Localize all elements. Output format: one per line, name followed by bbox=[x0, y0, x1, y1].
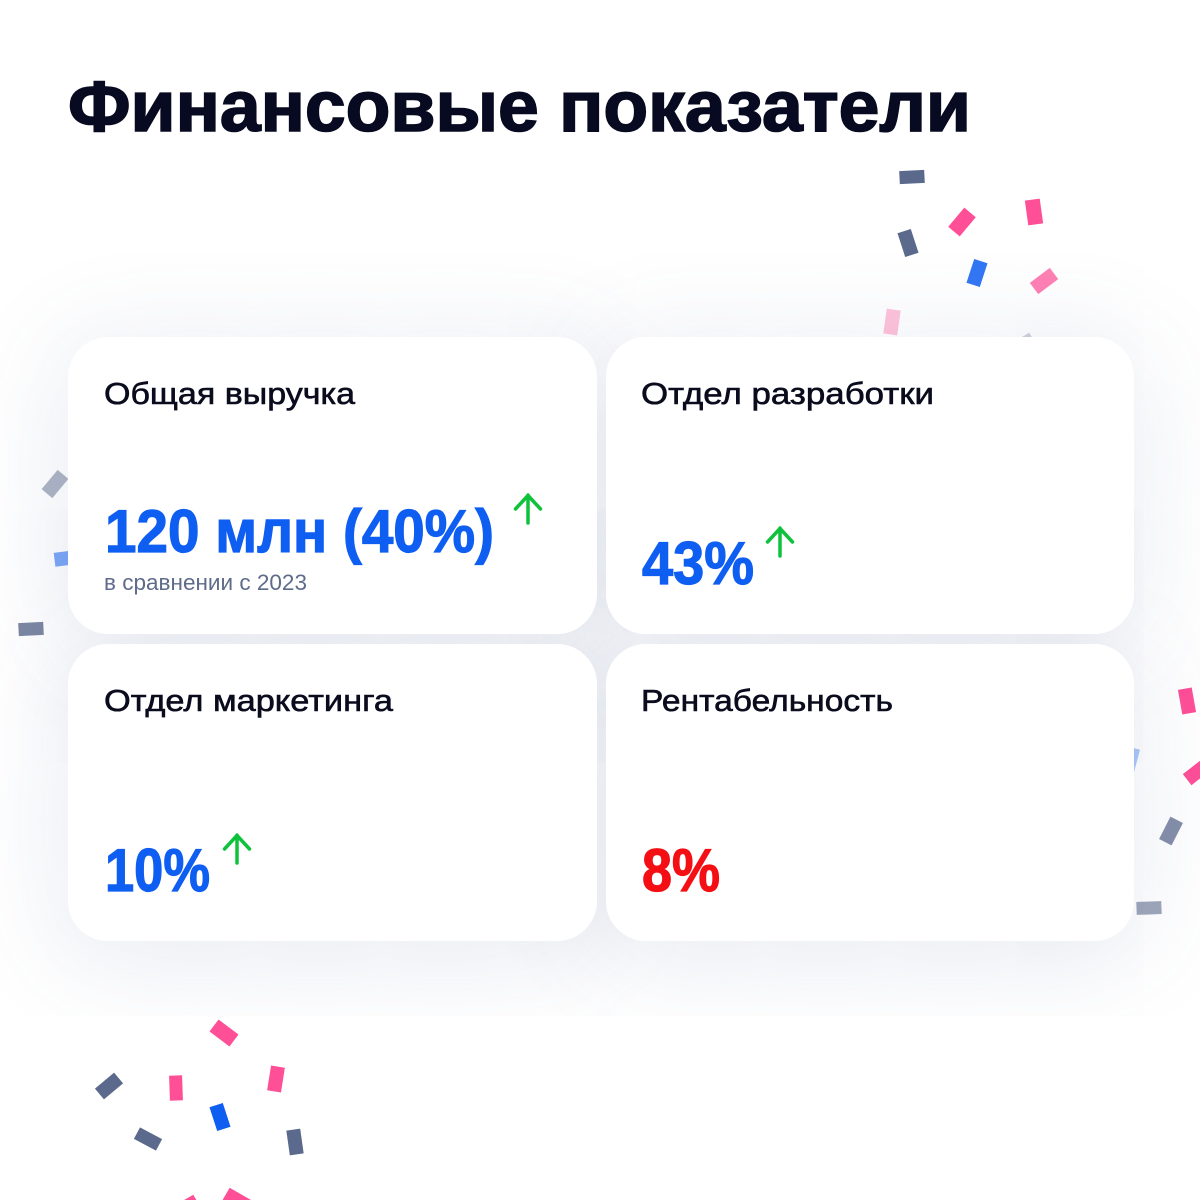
panel: marketing department bbox=[104, 683, 394, 904]
panel: total revenue bbox=[104, 376, 540, 595]
caption: comparison: в сравнении с 2023 bbox=[104, 570, 307, 595]
icon: green up arrow bbox=[516, 495, 540, 523]
title: Финансовые показатели bbox=[68, 68, 971, 147]
panel: profitability bbox=[641, 683, 893, 904]
value: 10%: 10% bbox=[105, 837, 210, 904]
panel: development department bbox=[641, 376, 934, 597]
heading: total revenue: Общая выручка bbox=[104, 376, 356, 411]
heading: profitability: Рентабельность bbox=[641, 683, 893, 718]
heading: development: Отдел разработки bbox=[641, 376, 934, 411]
value: 8%: 8% bbox=[642, 837, 720, 904]
icon: green up arrow bbox=[224, 835, 250, 863]
value: revenue: 120 млн (40%) bbox=[105, 498, 494, 565]
icon: green up arrow bbox=[768, 528, 792, 556]
value: 43%: 43% bbox=[642, 530, 754, 597]
heading: marketing: Отдел маркетинга bbox=[104, 683, 394, 718]
